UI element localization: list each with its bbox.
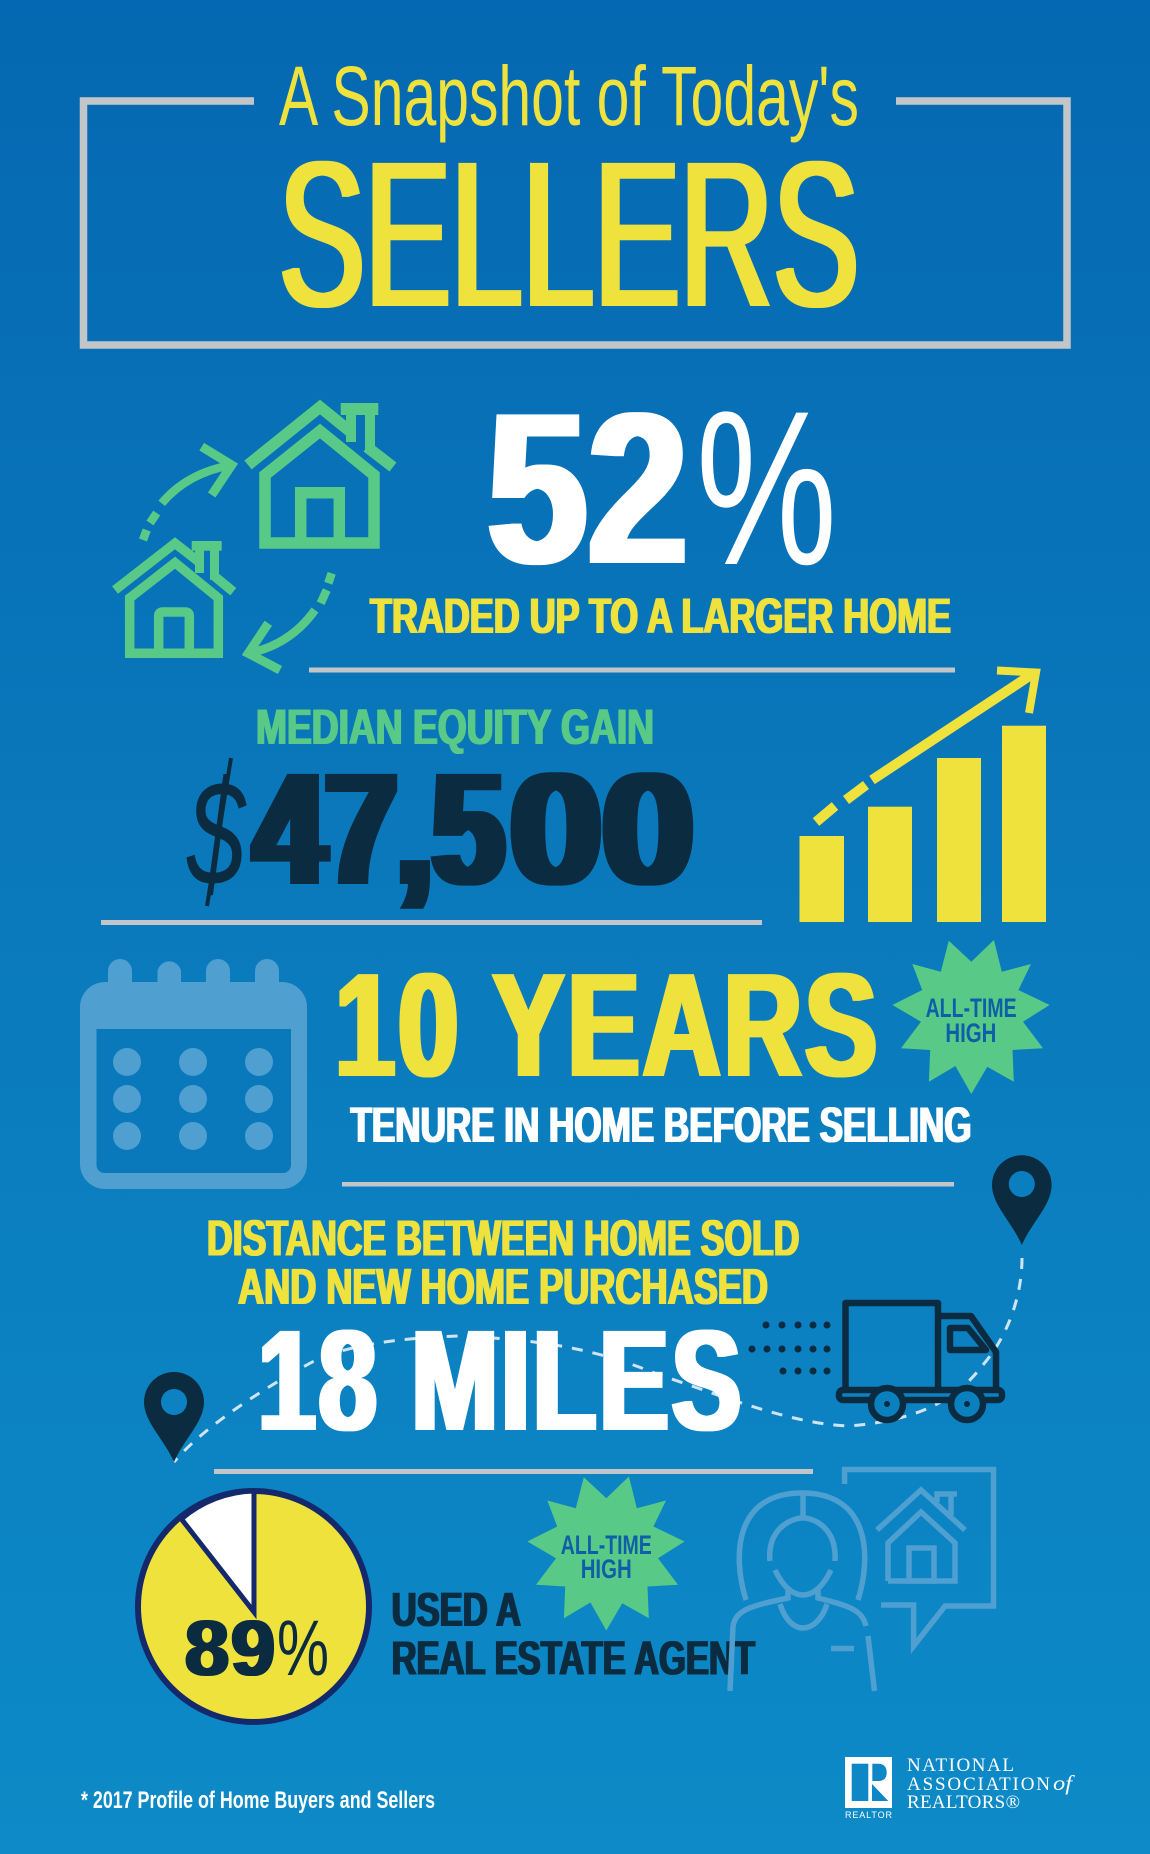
dashed route xyxy=(174,1258,1022,1462)
panel: distance xyxy=(144,1155,1052,1462)
logo: National Association of Realtors xyxy=(845,1755,1076,1820)
icon: agent with speech bubble house xyxy=(730,1470,994,1691)
label: real estate agent: REAL ESTATE AGENT xyxy=(392,1632,755,1686)
badge: all-time high: ALL-TIME xyxy=(926,993,1017,1023)
badge: all-time high: HIGH xyxy=(581,1554,632,1584)
badge: all-time high: HIGH xyxy=(945,1018,996,1048)
statistic: 47,500: 00 xyxy=(510,739,694,918)
logo wordmark: NATIONAL xyxy=(907,1755,1014,1776)
logo wordmark: REALTORS® xyxy=(907,1792,1020,1813)
statistic: 18 miles: 18 MILES xyxy=(258,1300,744,1461)
statistic: dollar sign: $ xyxy=(186,749,247,917)
statistic: 52: 52 xyxy=(487,367,688,609)
icon: left map pin xyxy=(144,1372,204,1462)
statistic: percent sign: % xyxy=(696,365,837,611)
chart: 89 percent pie xyxy=(138,1491,369,1722)
label: used a: USED A xyxy=(392,1584,521,1637)
label: median equity gain: MEDIAN EQUITY GAIN xyxy=(256,699,654,755)
panel: traded up xyxy=(115,365,951,670)
logo wordmark: ASSOCIATION xyxy=(907,1774,1050,1795)
statistic: 89: 89 xyxy=(185,1603,277,1692)
icon: houses with cycle arrows xyxy=(115,403,393,670)
statistic: percent sign: % xyxy=(277,1603,329,1692)
label: distance line one: DISTANCE BETWEEN HOME SOLD xyxy=(207,1210,800,1266)
badge: all-time high xyxy=(527,1476,685,1630)
icon: speed dots xyxy=(748,1322,830,1374)
chart: rising bars with arrow xyxy=(800,670,1046,922)
icon: right map pin xyxy=(992,1155,1052,1245)
badge: all-time high: ALL-TIME xyxy=(561,1530,652,1560)
panel: tenure xyxy=(80,940,1050,1189)
logo mark: REALTOR xyxy=(845,1810,892,1820)
logo wordmark xyxy=(907,1755,1076,1813)
statistic: 10 years: 10 YEARS xyxy=(335,943,880,1108)
icon: moving truck xyxy=(839,1303,1002,1420)
label: distance line two: AND NEW HOME PURCHASED xyxy=(238,1258,768,1315)
title line one: A Snapshot of Today's xyxy=(279,49,859,143)
badge: all-time high xyxy=(892,940,1050,1094)
statistic: 47,500: 47,5 xyxy=(254,739,504,918)
panel: median equity xyxy=(186,670,1046,922)
frame xyxy=(84,101,1067,345)
logo wordmark: of xyxy=(1053,1771,1076,1795)
panel: used an agent xyxy=(138,1470,994,1722)
footnote: * 2017 Profile of Home Buyers and Sellers xyxy=(81,1787,435,1814)
icon: calendar xyxy=(80,959,307,1189)
panel: title frame xyxy=(84,49,1067,351)
logo mark xyxy=(845,1757,892,1820)
